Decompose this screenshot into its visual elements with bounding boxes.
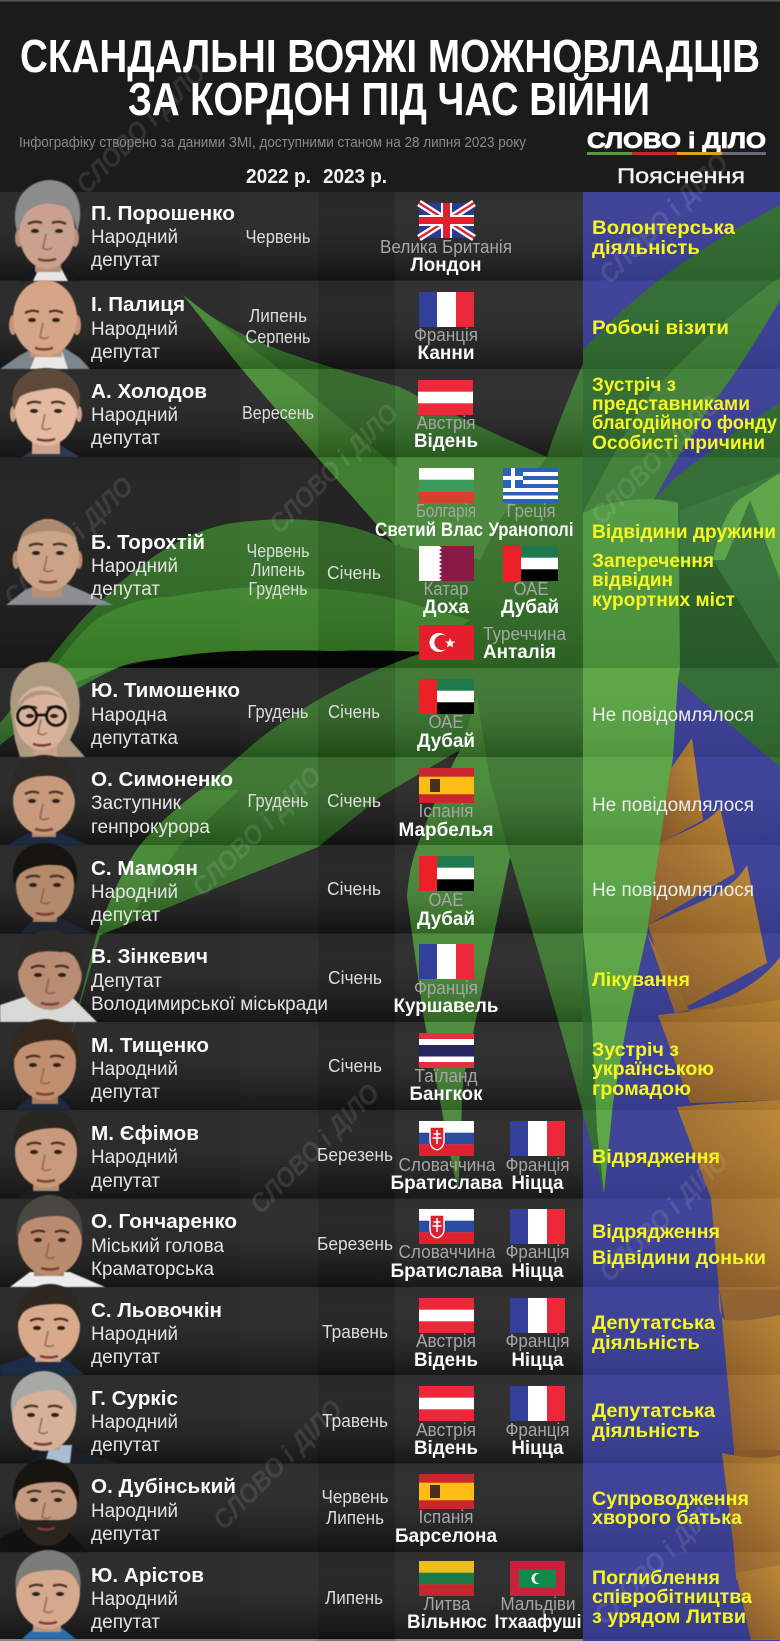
- name: Єфімов: депутат: [91, 1171, 160, 1192]
- name: Порошенко: [91, 202, 235, 271]
- row: Гончаренко: [10, 1195, 766, 1287]
- destination: Відень: [414, 413, 478, 452]
- explanation: Відвідини доньки: [592, 1247, 766, 1269]
- name: Холодов: депутат: [91, 428, 160, 449]
- destination: Відень: [414, 1420, 478, 1459]
- month 2023: Липень: [325, 1588, 383, 1608]
- destination: Барселона: [395, 1507, 497, 1547]
- explanation: співробітництва: [592, 1586, 752, 1608]
- icon: flag France: [419, 944, 474, 979]
- name: Тищенко: М. Тищенко: [91, 1034, 209, 1057]
- month 2023: Січень: [328, 702, 380, 722]
- months 2023: Червень: [322, 1487, 388, 1507]
- name: Зінкевич: В. Зінкевич: [91, 945, 208, 968]
- destination: Ітхаафуші: Ітхаафуші: [494, 1612, 582, 1633]
- destination: Бангкок: Бангкок: [410, 1084, 483, 1105]
- row: Арістов: [15, 1550, 752, 1639]
- watermarks: СЛОВО і ДІЛО: [186, 761, 327, 902]
- destination: Братислава: Словаччина: [398, 1242, 496, 1262]
- destination: Братислава: Братислава: [390, 1173, 503, 1194]
- name: Льовочкін: С. Льовочкін: [91, 1299, 222, 1322]
- watermarks: СЛОВО і ДІЛО: [593, 1146, 734, 1287]
- destination: Канни: [414, 325, 478, 364]
- name: Мамоян: [91, 857, 198, 926]
- name: Порошенко: П. Порошенко: [91, 202, 235, 225]
- month 2023: Січень: [328, 968, 382, 988]
- icon: flag Slovakia: [419, 1121, 474, 1156]
- months 2022: [246, 541, 310, 599]
- name: Гончаренко: О. Гончаренко: [91, 1210, 237, 1233]
- photo: Єфімов: [13, 1109, 84, 1198]
- destination: Дубай: ОАЕ: [428, 890, 464, 910]
- explanation: Не повідомлялося: [592, 705, 754, 726]
- destination: Ніцца: Франція: [506, 1420, 570, 1440]
- explanation: Заперечення: [592, 550, 714, 572]
- name: Тищенко: депутат: [91, 1082, 160, 1103]
- name: Симоненко: [91, 768, 233, 838]
- name: Тимошенко: [91, 679, 240, 749]
- title: ЗА КОРДОН ПІД ЧАС ВІЙНИ: [128, 73, 650, 125]
- name: Зінкевич: [91, 945, 328, 1015]
- destination: Бангкок: [410, 1066, 483, 1105]
- explanation: [592, 217, 735, 259]
- row: Льовочкін: [0, 1284, 715, 1375]
- name: Палиця: депутат: [91, 342, 160, 363]
- icon: flag Lithuania: [419, 1561, 474, 1596]
- explanation: [592, 1039, 714, 1100]
- icon: flag France: [510, 1209, 565, 1244]
- name: Холодов: [91, 380, 207, 449]
- name: Арістов: Народний: [91, 1589, 178, 1610]
- icon: flag Turkey: [419, 625, 474, 660]
- destination: Анталія: [483, 624, 567, 663]
- photo: Порошенко: [15, 180, 80, 281]
- months 2022: Липень: [251, 560, 305, 580]
- subtitle: source note: Інфографіку створено за даними ЗМІ, доступними станом на 28 липня 2023 року: [19, 135, 527, 151]
- name: Палиця: Народний: [91, 319, 178, 340]
- watermarks: СЛОВО і ДІЛО: [593, 148, 734, 289]
- watermarks: СЛОВО і ДІЛО: [263, 398, 404, 539]
- name: Симоненко: Заступник: [91, 793, 182, 814]
- name: Палиця: [91, 293, 185, 363]
- destination: Дубай: [417, 712, 475, 752]
- months 2022: [246, 306, 310, 347]
- name: Суркіс: Г. Суркіс: [91, 1387, 178, 1410]
- destination: Ніцца: Ніцца: [512, 1350, 564, 1371]
- months 2023: Липень: [326, 1508, 384, 1528]
- name: Холодов: А. Холодов: [91, 380, 207, 403]
- destination: Братислава: Братислава: [390, 1261, 503, 1282]
- destination: Канни: Канни: [418, 343, 474, 364]
- icon: flag France: [510, 1121, 565, 1156]
- icon: flag Maldives: [510, 1561, 565, 1596]
- destination: Канни: Франція: [414, 325, 478, 345]
- month 2022: Червень: [246, 227, 310, 247]
- destination: Братислава: [390, 1242, 503, 1282]
- months 2022: Липень: [249, 306, 307, 326]
- destination: Вільнюс: [407, 1594, 487, 1633]
- icon: flag France: [510, 1386, 565, 1421]
- name: Суркіс: Народний: [91, 1412, 178, 1433]
- destination: Уранополі: Греція: [506, 501, 556, 521]
- name: Порошенко: депутат: [91, 250, 160, 271]
- destination: Лондон: Велика Британія: [380, 237, 512, 257]
- name: Тимошенко: Ю. Тимошенко: [91, 679, 240, 702]
- month 2022: Грудень: [248, 791, 308, 811]
- watermarks: СЛОВО і ДІЛО: [70, 58, 211, 199]
- name: Мамоян: Народний: [91, 882, 178, 903]
- icon: flag Spain: [419, 768, 474, 803]
- photo: Гончаренко: [10, 1195, 105, 1287]
- destination: Відень: Відень: [414, 1350, 478, 1371]
- name: Торохтій: Б. Торохтій: [91, 531, 205, 554]
- destination: Ніцца: [506, 1331, 570, 1371]
- name: Суркіс: [91, 1387, 178, 1456]
- month 2023: Березень: [317, 1234, 393, 1254]
- icon: flag France: [419, 292, 474, 327]
- destination: Відень: Австрія: [416, 1420, 476, 1440]
- name: Тищенко: [91, 1034, 209, 1103]
- month 2023: Січень: [327, 879, 381, 899]
- destination: Куршавель: Куршавель: [394, 996, 498, 1017]
- icon: flag Austria: [418, 380, 473, 415]
- name: Гончаренко: [91, 1210, 237, 1280]
- name: Гончаренко: Міський голова: [91, 1236, 224, 1257]
- name: Арістов: депутат: [91, 1612, 160, 1633]
- name: Льовочкін: [91, 1299, 222, 1368]
- row: Тимошенко: [10, 662, 754, 757]
- explanation: [592, 1221, 766, 1269]
- icon: flag Slovakia: [419, 1209, 474, 1244]
- photo: Дубінський: [0, 1459, 88, 1552]
- row: Торохтій: [6, 468, 776, 663]
- icon: flag Austria: [419, 1298, 474, 1333]
- name: Торохтій: депутат: [91, 579, 160, 600]
- photo: Суркіс: [11, 1371, 118, 1463]
- destination: Дубай: Дубай: [417, 909, 475, 930]
- destination: Ніцца: Ніцца: [512, 1173, 564, 1194]
- icon: flag UAE: [503, 546, 558, 581]
- destination: Барселона: Барселона: [395, 1526, 497, 1547]
- watermarks: СЛОВО і ДІЛО: [585, 389, 726, 530]
- icon: flag Thailand: [419, 1033, 474, 1068]
- icon: flag UK: [419, 203, 474, 238]
- photo: Тимошенко: [10, 662, 85, 757]
- explanation: Зустріч з: [592, 1039, 679, 1061]
- destination: Марбелья: Іспанія: [418, 801, 474, 821]
- row: Мамоян: [13, 843, 754, 933]
- month 2023: Січень: [328, 1056, 382, 1076]
- row: Зінкевич: [0, 930, 690, 1022]
- destination: Вільнюс: Литва: [424, 1594, 471, 1614]
- explanation: Депутатська: [592, 1400, 715, 1422]
- destination: Анталія: Туреччина: [483, 624, 567, 644]
- destination: Светий Влас: [375, 501, 483, 541]
- destination: Дубай: Дубай: [417, 731, 475, 752]
- destination: Відень: Відень: [414, 431, 478, 452]
- column headers: [246, 165, 745, 188]
- destination: Доха: [423, 579, 469, 618]
- destination: Ніцца: [506, 1155, 570, 1194]
- name: Льовочкін: депутат: [91, 1347, 160, 1368]
- month 2022: Вересень: [242, 403, 314, 423]
- name: Тищенко: Народний: [91, 1059, 178, 1080]
- explanation: представниками: [592, 393, 750, 415]
- destination: Лондон: Лондон: [410, 255, 482, 276]
- name: Суркіс: депутат: [91, 1435, 160, 1456]
- icon: flag France: [510, 1298, 565, 1333]
- months 2022: Червень: [246, 541, 310, 561]
- destination: Барселона: Іспанія: [418, 1507, 474, 1527]
- destination: Відень: Австрія: [416, 1331, 476, 1351]
- explanation: Відрядження: [592, 1221, 720, 1243]
- name: Зінкевич: Депутат: [91, 971, 162, 992]
- name: Арістов: [91, 1564, 204, 1633]
- explanation: [592, 521, 776, 611]
- destination: Лондон: [380, 237, 512, 276]
- column headers: 2022 р.: [246, 166, 311, 188]
- explanation: Зустріч з: [592, 374, 676, 396]
- name: Зінкевич: Володимирської міськради: [91, 994, 328, 1015]
- destination: Ніцца: [506, 1420, 570, 1459]
- explanation: діяльність: [592, 1332, 700, 1354]
- explanation: [592, 374, 777, 454]
- explanation: Поглиблення: [592, 1567, 720, 1589]
- destination: Ніцца: Франція: [506, 1155, 570, 1175]
- icon: flag UAE: [419, 679, 474, 714]
- explanation: курортних міст: [592, 589, 735, 611]
- row: Суркіс: [11, 1371, 715, 1463]
- destination: Доха: Катар: [424, 579, 468, 599]
- destination: Дубай: ОАЕ: [514, 579, 548, 599]
- explanation: Робочі візити: [592, 317, 729, 339]
- destination: Відень: [414, 1331, 478, 1371]
- row: Палиця: [0, 280, 729, 369]
- row: Холодов: [10, 368, 777, 457]
- logo: СЛОВО і ДІЛО: [587, 128, 766, 153]
- name: Холодов: Народний: [91, 405, 178, 426]
- explanation: [592, 1400, 715, 1442]
- explanation: відвідин: [592, 569, 673, 591]
- explanation: українською: [592, 1058, 714, 1080]
- icon: flag UAE: [419, 856, 474, 891]
- destination: Братислава: [390, 1155, 503, 1194]
- destination: Марбелья: [398, 801, 494, 841]
- destination: Дубай: ОАЕ: [428, 712, 464, 732]
- row: Дубінський: [0, 1459, 749, 1552]
- destination: Ніцца: Франція: [506, 1242, 570, 1262]
- name: Симоненко: генпрокурора: [91, 817, 210, 838]
- watermarks: СЛОВО і ДІЛО: [588, 1489, 729, 1630]
- destination: Ітхаафуші: [494, 1594, 582, 1633]
- explanation: громадою: [592, 1078, 691, 1100]
- photo: Симоненко: [8, 755, 88, 845]
- name: Палиця: І. Палиця: [91, 293, 185, 316]
- explanation: Лікування: [592, 969, 690, 991]
- watermarks: СЛОВО і ДІЛО: [207, 1394, 348, 1535]
- name: Торохтій: [91, 531, 205, 600]
- name: Мамоян: депутат: [91, 905, 160, 926]
- explanation: Депутатська: [592, 1312, 715, 1334]
- destination: Бангкок: Таїланд: [414, 1066, 478, 1086]
- name: Дубінський: Народний: [91, 1501, 178, 1522]
- months 2023: [322, 1487, 388, 1528]
- explanation: Не повідомлялося: [592, 880, 754, 901]
- photo: Льовочкін: [0, 1284, 85, 1375]
- month 2023: Січень: [327, 791, 381, 811]
- icon: flag Qatar: [419, 546, 474, 581]
- explanation: хворого батька: [592, 1507, 742, 1529]
- destination: Куршавель: [394, 978, 498, 1017]
- destination: Марбелья: Марбелья: [398, 820, 494, 841]
- icon: flag Greece: [503, 468, 558, 503]
- destination: Уранополі: Уранополі: [488, 520, 574, 541]
- photo: Зінкевич: [0, 930, 97, 1022]
- name: Льовочкін: Народний: [91, 1324, 178, 1345]
- icon: flag Spain: [419, 1474, 474, 1509]
- explanation: з урядом Литви: [592, 1606, 746, 1628]
- destination: Відень: Відень: [414, 1438, 478, 1459]
- row: Єфімов: [13, 1109, 720, 1198]
- explanation: Особисті причини: [592, 432, 765, 454]
- photo: Тищенко: [11, 1019, 79, 1110]
- photo: Арістов: [15, 1550, 81, 1639]
- explanation: Відрядження: [592, 1146, 720, 1168]
- explanation: Відвідини дружини: [592, 521, 776, 543]
- destination: Дубай: [501, 579, 559, 618]
- name: Торохтій: Народний: [91, 556, 178, 577]
- name: Мамоян: С. Мамоян: [91, 857, 198, 880]
- photo: Торохтій: [6, 519, 113, 605]
- months 2022: Серпень: [246, 327, 310, 347]
- explanation: [592, 1488, 749, 1529]
- destination: Ніцца: Ніцца: [512, 1261, 564, 1282]
- column headers: 2023 р.: [323, 166, 387, 188]
- explanation: Супроводження: [592, 1488, 749, 1510]
- destination: Куршавель: Франція: [414, 978, 478, 998]
- destination: Вільнюс: Вільнюс: [407, 1612, 487, 1633]
- photo: Холодов: [10, 368, 82, 457]
- name: Гончаренко: Краматорська: [91, 1259, 214, 1280]
- explanation: Не повідомлялося: [592, 795, 754, 816]
- name: Тимошенко: Народна: [91, 705, 167, 726]
- months 2022: Грудень: [248, 579, 308, 599]
- explanation: [592, 1312, 715, 1354]
- watermarks: СЛОВО і ДІЛО: [0, 471, 139, 612]
- name: Тимошенко: депутатка: [91, 728, 178, 749]
- icon: flag Bulgaria: [419, 468, 474, 503]
- destination: Анталія: Анталія: [483, 642, 556, 663]
- photo: Мамоян: [13, 843, 92, 933]
- destination: Ніцца: Ніцца: [512, 1438, 564, 1459]
- name: Дубінський: О. Дубінський: [91, 1475, 236, 1498]
- name: Арістов: Ю. Арістов: [91, 1564, 204, 1587]
- explanation: діяльність: [592, 1420, 700, 1442]
- name: Порошенко: Народний: [91, 227, 178, 248]
- destination: Братислава: Словаччина: [398, 1155, 496, 1175]
- month 2023: Травень: [322, 1411, 388, 1431]
- name: Єфімов: [91, 1122, 199, 1192]
- destination: Ітхаафуші: Мальдіви: [500, 1594, 576, 1614]
- destination: Ніцца: [506, 1242, 570, 1282]
- title: [20, 30, 760, 125]
- name: Дубінський: [91, 1475, 236, 1545]
- month 2023: Березень: [317, 1145, 393, 1165]
- destination: Светий Влас: Светий Влас: [375, 520, 483, 541]
- destination: Доха: Доха: [423, 597, 469, 618]
- month 2023: Січень: [327, 563, 381, 583]
- destination: Ніцца: Франція: [506, 1331, 570, 1351]
- explanation: діяльність: [592, 237, 700, 259]
- name: Єфімов: Народний: [91, 1147, 178, 1168]
- month 2022: Грудень: [248, 702, 308, 722]
- row: Симоненко: [8, 755, 754, 845]
- watermarks: СЛОВО і ДІЛО: [244, 1078, 385, 1219]
- explanation: Волонтерська: [592, 217, 735, 239]
- destination: Дубай: Дубай: [501, 597, 559, 618]
- name: Симоненко: О. Симоненко: [91, 768, 233, 791]
- explanation: [592, 1567, 752, 1628]
- name: Єфімов: М. Єфімов: [91, 1122, 199, 1145]
- row: Тищенко: [11, 1019, 714, 1110]
- icon: flag Austria: [419, 1386, 474, 1421]
- destination: Светий Влас: Болгарія: [416, 501, 476, 521]
- column headers: Пояснення: [617, 165, 745, 188]
- row: Порошенко: [15, 180, 735, 281]
- photo: Палиця: [0, 280, 90, 369]
- destination: Дубай: [417, 890, 475, 930]
- destination: Уранополі: [488, 501, 574, 541]
- month 2023: Травень: [322, 1322, 388, 1342]
- destination: Відень: Австрія: [416, 413, 476, 433]
- name: Дубінський: депутат: [91, 1524, 160, 1545]
